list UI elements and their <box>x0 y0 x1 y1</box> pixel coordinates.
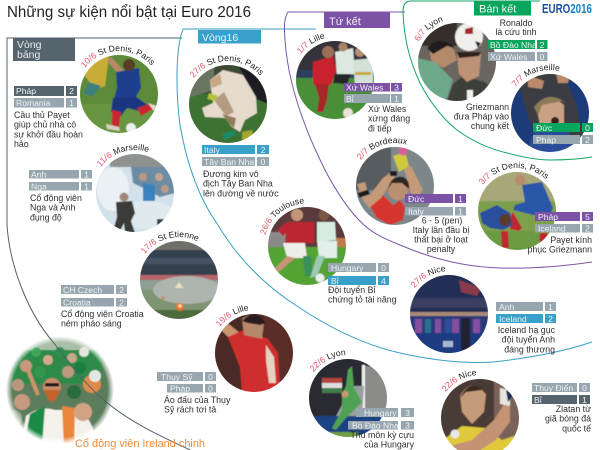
caption: thất bại ở loạt <box>414 234 468 244</box>
date and venue: 2/7 Bordeaux <box>357 138 408 160</box>
caption: Griezmann <box>466 102 509 112</box>
date and venue: 10/6 St Denis, Paris <box>81 45 154 68</box>
caption: Cổ động viên Croatia <box>61 309 144 319</box>
score: Anh 1: Anh <box>499 302 515 312</box>
score: Thụy Điển 0 <box>532 383 590 393</box>
caption: sự khởi đầu hoàn <box>14 129 83 139</box>
photo: Payet <box>79 54 159 134</box>
match: Xứ Wales - Bỉ <box>296 34 410 134</box>
date and venue: 26/6 Toulouse <box>260 199 304 235</box>
date and venue: 7/7 Marseille <box>512 64 560 86</box>
panel: bán kết <box>402 0 593 160</box>
caption: giã bóng đá <box>545 414 591 424</box>
caption: Zlatan từ <box>556 404 591 414</box>
match: Thụy Sỹ - Pháp <box>157 305 293 415</box>
photo: Iceland team <box>409 274 489 354</box>
score: CH Czech 2: CH Czech <box>63 285 102 295</box>
score: Xứ Wales 3: Xứ Wales <box>346 82 383 92</box>
score: Nga 1 <box>29 182 92 192</box>
photo: Lille match <box>295 40 375 120</box>
score: Hungary 3: 3 <box>405 408 410 418</box>
caption: lên đường về nước <box>203 188 279 198</box>
caption: địch Tây Ban Nha <box>203 179 273 189</box>
caption: Đội tuyển Bỉ <box>328 285 375 295</box>
caption: Ronaldo <box>500 18 532 28</box>
heading: tứ kết <box>324 12 390 28</box>
caption: phục Griezmann <box>527 245 592 255</box>
score: Tây Ban Nha 0: 0 <box>261 157 266 167</box>
score: Thụy Sỹ 0 <box>157 372 216 382</box>
caption: giúp chủ nhà có <box>14 120 76 130</box>
date and venue: 22/6 Nice <box>442 370 476 392</box>
date and venue: 11/6 Marseille <box>97 144 149 167</box>
caption: Italy lần đầu bị <box>413 225 469 235</box>
caption: ném pháo sáng <box>61 319 122 329</box>
score: Italy 1 <box>405 206 466 216</box>
score: Pháp 2: Pháp <box>16 86 36 96</box>
caption: đụng độ <box>30 212 62 222</box>
caption: Nga và Anh <box>30 203 76 213</box>
photo: St Etienne flares <box>139 240 221 320</box>
score: Đức 0: 0 <box>585 123 590 133</box>
score: Thụy Sỹ 0: Thụy Sỹ <box>161 372 193 382</box>
score: Pháp 2: 2 <box>585 135 590 145</box>
caption: xứng đáng <box>368 114 410 124</box>
score: Xứ Wales 0: 0 <box>540 52 545 62</box>
match: Đức - Pháp <box>454 64 593 152</box>
caption: Thủ môn kỳ cựu <box>350 430 414 440</box>
caption: Cổ động viên <box>30 193 82 203</box>
logo: Euro 2016: EURO2016 <box>542 1 592 16</box>
curve: bán kết frame <box>403 1 592 160</box>
title: Những sự kiện nổi bật tại Euro 2016 <box>7 4 251 21</box>
photo: Griezmann celebrating <box>510 73 590 153</box>
photo: Payet and Griezmann <box>477 171 557 251</box>
match: Hungary - Bồ Đào Nha <box>309 350 415 450</box>
caption: Cầu thủ Payet <box>14 110 70 120</box>
photo: Marseille clash <box>95 153 175 233</box>
score: Croatia 2: Croatia <box>63 298 91 308</box>
match: Italy - Tây Ban Nha <box>189 55 279 198</box>
caption: chung kết <box>471 121 510 131</box>
score: Pháp 5 <box>535 212 593 222</box>
date and venue: 6/7 Lyon <box>414 17 443 41</box>
caption: Xứ Wales <box>368 104 407 114</box>
photo: Hungarian goalkeeper <box>308 358 388 438</box>
score: Hungary 3: Hungary <box>364 408 397 418</box>
heading: vòng bảng: bảng <box>17 49 41 61</box>
score: Pháp 5: 5 <box>585 212 590 222</box>
score: Bỉ 1: Bỉ <box>534 395 542 405</box>
score: Bỉ 1 <box>344 94 402 104</box>
score: Đức 0 <box>533 123 593 133</box>
score: Xứ Wales 3 <box>344 82 402 92</box>
photo: crouching Spanish player <box>188 64 268 144</box>
match: Pháp - Romania <box>14 45 158 149</box>
heading: tứ kết: Tứ kết <box>329 16 361 28</box>
score: Iceland 2: 2 <box>585 224 590 234</box>
score: Pháp 0 <box>167 384 216 394</box>
photo: Ronaldo header <box>417 22 497 102</box>
score: Bỉ 1: Bỉ <box>346 94 354 104</box>
score: Xứ Wales 0: Xứ Wales <box>490 52 527 62</box>
heading: vòng bảng: Vòng <box>17 39 42 51</box>
score: Xứ Wales 0 <box>488 52 548 62</box>
score: Italy 2: Italy <box>204 145 220 155</box>
match: Bồ Đào Nha - Xứ Wales <box>414 17 548 101</box>
curve: vòng bảng frame <box>7 38 190 450</box>
score: Anh 1 <box>29 170 92 180</box>
caption: hảo <box>14 139 29 149</box>
score: Iceland 2 <box>496 314 556 324</box>
photo: Ireland fans <box>6 336 114 444</box>
score: Bồ Đào Nha 2: 2 <box>540 40 545 50</box>
caption: Iceland hạ gục <box>498 325 556 335</box>
heading: vòng 16: Vòng16 <box>202 32 238 44</box>
caption: penalty <box>427 244 456 254</box>
score: Bồ Đào Nha 3: Bồ Đào Nha <box>352 420 399 430</box>
score: Pháp 0: Pháp <box>170 384 190 394</box>
date and venue: 1/7 Lille <box>297 34 324 54</box>
curve: vòng 16 frame <box>177 29 592 363</box>
score: Thụy Điển 0: Thụy Điển <box>534 383 573 393</box>
match: Anh - Iceland <box>410 266 556 354</box>
score: Tây Ban Nha 0: Tây Ban Nha <box>204 157 254 167</box>
photo: torn Swiss shirt <box>214 313 294 393</box>
photo: Buffon <box>355 146 435 226</box>
score: Pháp 5: Pháp <box>538 212 558 222</box>
score: Bỉ 4 <box>328 276 389 286</box>
score: CH Czech 2: 2 <box>119 285 124 295</box>
heading: bán kết: Bán kết <box>479 4 516 16</box>
score: Pháp 2 <box>533 135 593 145</box>
date and venue: 17/6 St Etienne <box>141 230 198 254</box>
caption: Áo đấu của Thụy <box>164 395 231 405</box>
heading: vòng bảng <box>13 38 75 61</box>
score: Bỉ 1: 1 <box>582 395 587 405</box>
score: Pháp 0: 0 <box>208 384 213 394</box>
score: Italy 2 <box>202 145 269 155</box>
score: Pháp 2 <box>14 86 77 96</box>
caption: đi tiếp <box>368 123 392 133</box>
caption: của Hungary <box>364 440 415 450</box>
date and venue: 19/6 Lille <box>216 305 248 327</box>
score: Bỉ 1 <box>532 395 590 405</box>
score: Pháp 2: 2 <box>69 86 74 96</box>
score: Bồ Đào Nha 2: Bồ Đào Nha <box>490 40 537 50</box>
date and venue: 3/7 St Denis, Paris <box>479 162 548 184</box>
score: Hungary 0: 0 <box>381 263 386 273</box>
caption: Đương kim vô <box>203 169 259 179</box>
match: Pháp - Iceland <box>478 162 593 255</box>
match: Đức - Italy <box>356 138 469 254</box>
score: Bỉ 4: Bỉ <box>331 276 339 286</box>
score: Romania 1: Romania <box>16 98 51 108</box>
score: Hungary 0: Hungary <box>331 263 364 273</box>
photo: Toulouse match <box>267 206 347 286</box>
score: Anh 1: 1 <box>548 302 553 312</box>
score: Đức 1: 1 <box>458 194 463 204</box>
match: Hungary - Bỉ <box>260 199 397 305</box>
score: Iceland 2: Iceland <box>499 314 527 324</box>
match: Anh - Nga <box>29 144 174 232</box>
match: Thụy Điển - Bỉ <box>441 370 591 450</box>
score: Italy 1: Italy <box>408 206 424 216</box>
curve: tứ kết frame <box>284 12 592 268</box>
score: Iceland 2 <box>535 224 593 234</box>
score: Hungary 0 <box>328 263 389 273</box>
date and venue: 27/6 Nice <box>411 266 445 288</box>
score: Iceland 2: Iceland <box>538 224 566 234</box>
caption: 6 - 5 (pen) <box>422 216 462 226</box>
panel: vòng 16 <box>176 28 592 450</box>
caption: quốc tế <box>562 423 591 433</box>
heading: bán kết <box>474 2 531 16</box>
score: Hungary 3 <box>356 408 414 418</box>
heading: vòng 16 <box>198 30 261 44</box>
score: Romania 1 <box>14 98 77 108</box>
score: Anh 1: 1 <box>84 170 89 180</box>
photo: Zlatan <box>440 378 520 450</box>
score: Iceland 2: 2 <box>548 314 553 324</box>
score: Anh 1 <box>496 302 556 312</box>
score: Italy 2: 2 <box>261 145 266 155</box>
caption: Ireland fans: Cổ động viên Ireland chinh <box>75 438 205 450</box>
caption: đưa Pháp vào <box>454 112 509 122</box>
date and venue: 22/6 Lyon <box>310 350 346 372</box>
date and venue: 27/6 St Denis, Paris <box>190 55 263 78</box>
score: CH Czech 2 <box>61 285 127 295</box>
caption: là cứu tinh <box>495 27 537 37</box>
score: Bỉ 4: 4 <box>381 276 386 286</box>
score: Xứ Wales 3: 3 <box>394 82 399 92</box>
score: Đức 1: Đức <box>408 194 425 204</box>
score: Bồ Đào Nha 3: 3 <box>405 420 410 430</box>
score: Nga 1: 1 <box>84 182 89 192</box>
score: Nga 1: Nga <box>31 182 47 192</box>
panel: vòng bảng <box>6 38 293 450</box>
panel: tứ kết <box>284 12 593 269</box>
score: Đức 0: Đức <box>536 123 553 133</box>
caption: Sỹ rách tơi tả <box>164 405 216 415</box>
score: Bỉ 1: 1 <box>394 94 399 104</box>
score: Thụy Sỹ 0: 0 <box>208 372 213 382</box>
score: Đức 1 <box>405 194 466 204</box>
caption: Payet kính <box>550 235 592 245</box>
caption: đội tuyển Anh <box>502 335 555 345</box>
score: Thụy Điển 0: 0 <box>582 383 587 393</box>
score: Anh 1: Anh <box>31 170 47 180</box>
score: Pháp 2: Pháp <box>536 135 556 145</box>
score: Italy 1: 1 <box>458 206 463 216</box>
score: Croatia 2 <box>61 298 127 308</box>
score: Romania 1: 1 <box>69 98 74 108</box>
caption: đáng thương <box>504 344 555 354</box>
match: CH Czech - Croatia <box>61 230 218 329</box>
score: Croatia 2: 2 <box>119 298 124 308</box>
caption: chứng tỏ tài năng <box>328 295 397 305</box>
